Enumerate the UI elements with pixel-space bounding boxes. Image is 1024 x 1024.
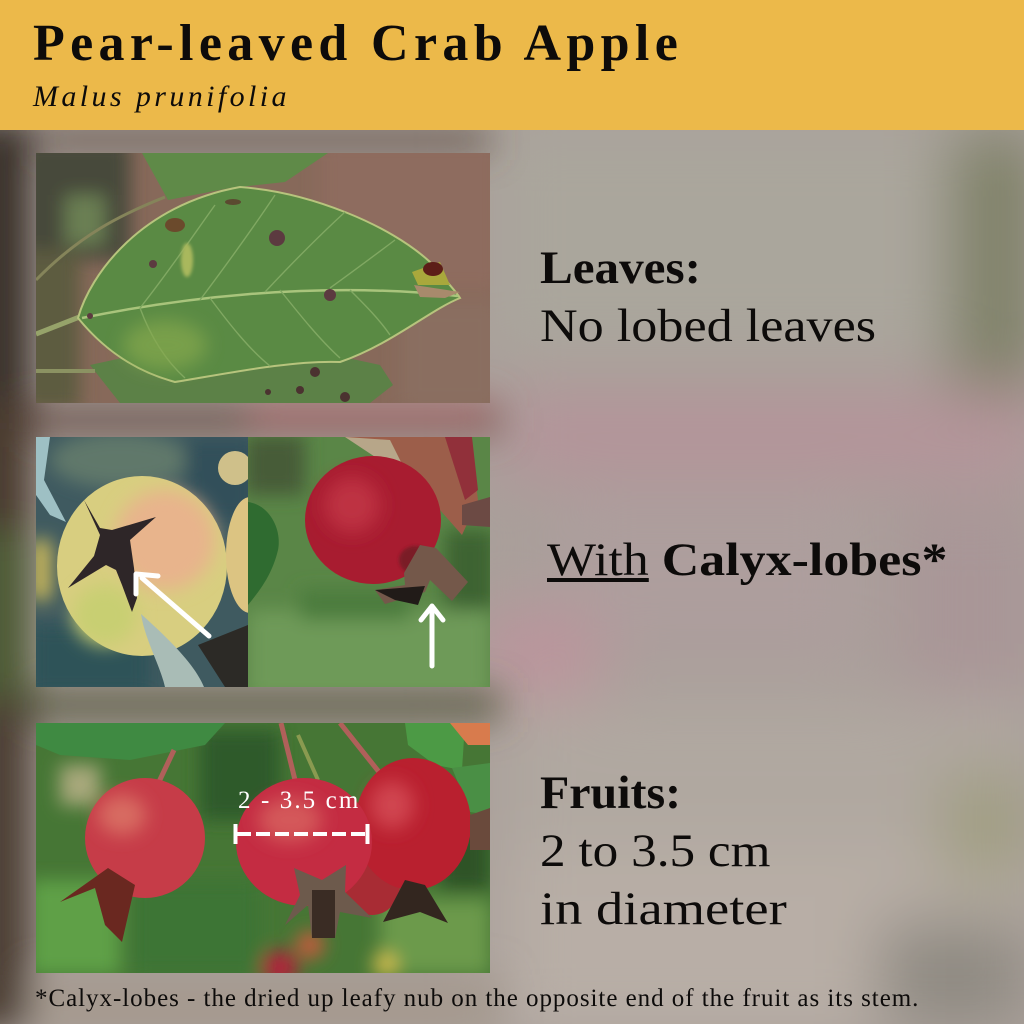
calyx: [285, 865, 372, 938]
photo: calyx left: [36, 437, 248, 687]
subtitle: Malus prunifolia: [33, 80, 290, 113]
leaves text: [540, 242, 876, 352]
stems: [36, 316, 82, 334]
calyx: [68, 500, 156, 612]
arrow: [421, 606, 443, 666]
main leaf: [78, 187, 460, 382]
photo: calyx right: [248, 437, 490, 687]
red apple: [305, 456, 441, 584]
back apple: [344, 855, 400, 915]
fruits text: Fruits:: [540, 767, 681, 819]
leaves text: Leaves:: [540, 242, 701, 294]
photo: leaf: [36, 153, 490, 403]
upper leaves: [36, 723, 225, 760]
blue-grey leaf: [141, 614, 204, 687]
dried leaf: [345, 437, 478, 535]
footnote: *Calyx-lobes - the dried up leafy nub on the opposite end of the fruit as its stem.: [35, 985, 919, 1012]
fruits text: 2 to 3.5 cm: [540, 825, 771, 877]
leaves text: No lobed leaves: [540, 300, 876, 352]
left apple: [85, 778, 205, 898]
header band: [0, 0, 1024, 130]
upper leaf: [142, 153, 328, 200]
photo: fruits: [36, 723, 490, 973]
fruits text: in diameter: [540, 883, 787, 935]
title: Pear-leaved Crab Apple: [33, 15, 683, 72]
lower leaf: [90, 352, 393, 403]
leaf at left edge: [36, 437, 66, 522]
stem: [198, 625, 248, 687]
measurement label: 2 - 3.5 cm: [238, 787, 360, 814]
right apple: [355, 758, 471, 890]
pale apple: [57, 476, 227, 656]
measurement line: [237, 832, 367, 836]
fruits text: [540, 767, 787, 935]
arrow: [136, 574, 209, 636]
calyx text: With Calyx-lobes*: [547, 534, 947, 586]
dark leaf: [248, 502, 279, 605]
centre apple: [236, 778, 372, 906]
stems: [157, 723, 379, 786]
calyx: [375, 545, 468, 604]
